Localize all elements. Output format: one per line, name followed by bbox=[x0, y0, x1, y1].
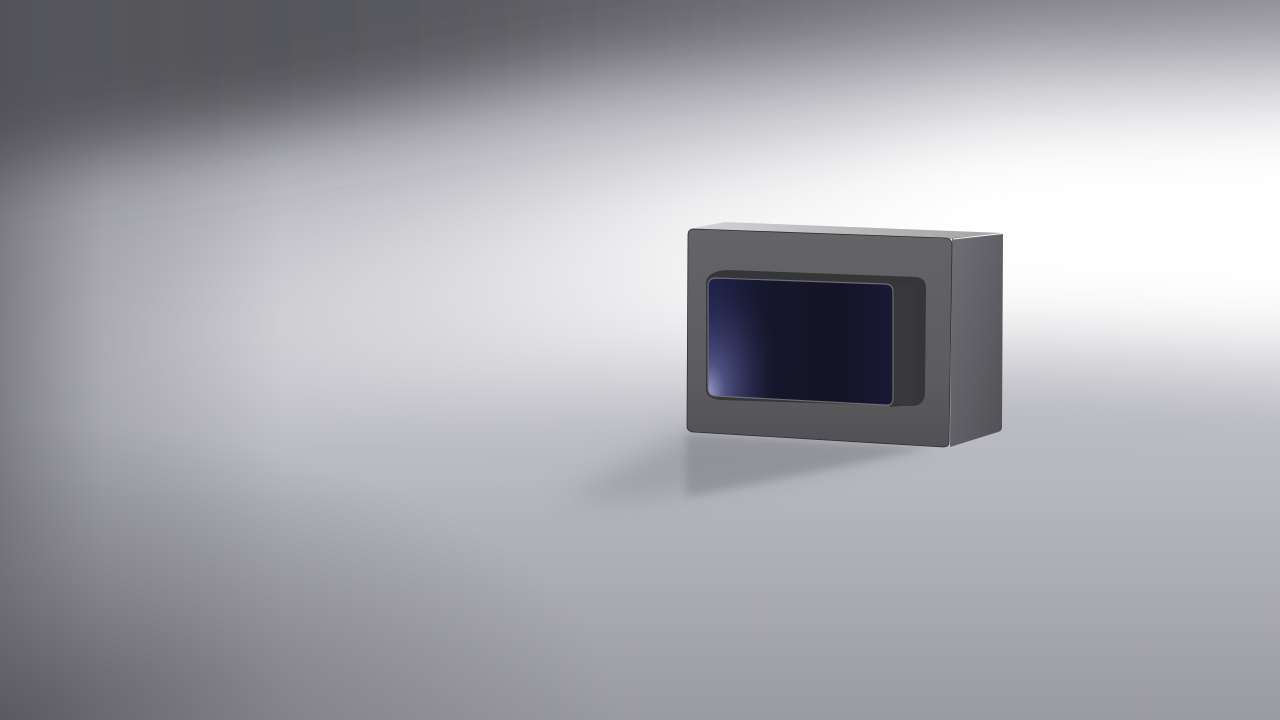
front face bbox=[687, 229, 952, 447]
top face bbox=[689, 222, 1003, 239]
housing step bbox=[890, 283, 914, 407]
side face bbox=[950, 234, 1003, 447]
lens glass bbox=[707, 277, 894, 406]
cast shadow under the module bbox=[560, 430, 930, 500]
edge highlight bbox=[953, 234, 1003, 239]
camera module body bbox=[687, 222, 1003, 447]
lens housing bbox=[706, 270, 926, 406]
